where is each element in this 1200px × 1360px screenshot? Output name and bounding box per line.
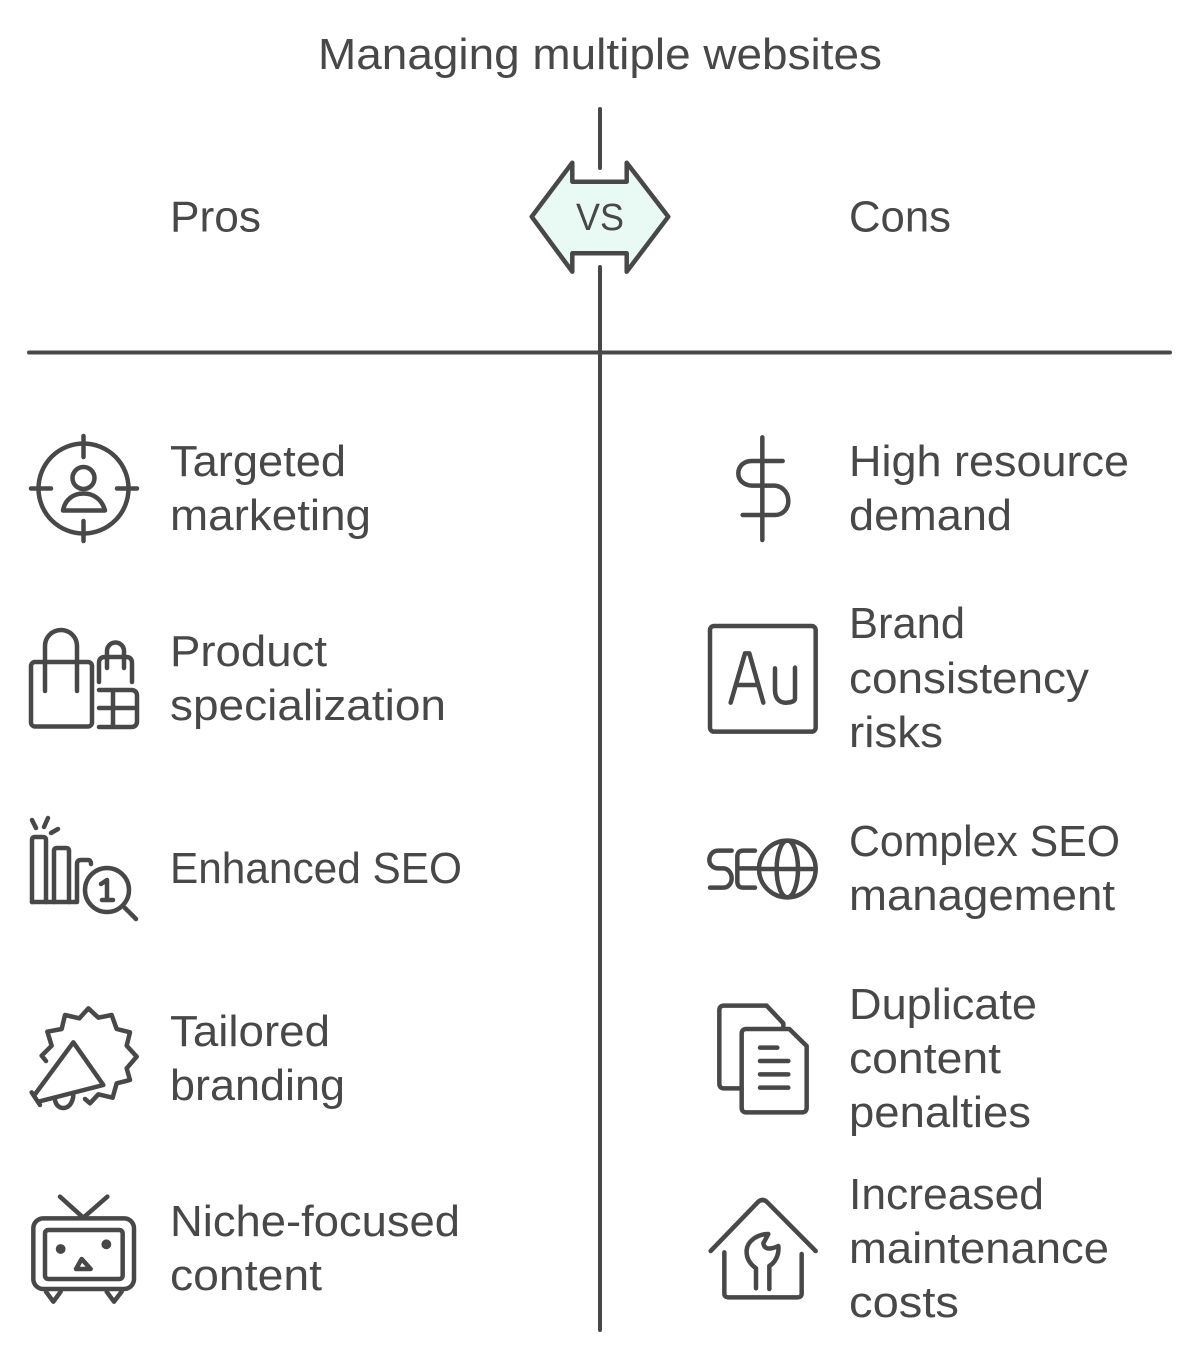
label: niche-focused content: Niche-focused [170,1197,460,1246]
label: duplicate content penalties [849,980,1037,1137]
label: duplicate content penalties: penalties [849,1088,1031,1137]
label: targeted marketing: Targeted [170,437,346,486]
heading: pros: Pros [170,192,261,242]
con item: duplicate content penalties [719,980,1037,1137]
label: niche-focused content: content [170,1251,322,1300]
con item: complex SEO management [709,817,1120,920]
label: duplicate content penalties: content [849,1034,1001,1083]
label: duplicate content penalties: Duplicate [849,980,1037,1029]
label: brand consistency risks: Brand [849,599,965,648]
label: increased maintenance costs: Increased [849,1170,1044,1219]
VS badge [532,163,668,272]
label: brand consistency risks: risks [849,708,943,757]
label: targeted marketing: marketing [170,491,371,540]
icon: duplicate documents [719,1006,807,1112]
horizontal divider [29,350,1170,354]
label: increased maintenance costs [849,1170,1109,1327]
label: high resource demand [849,437,1129,540]
icon: SEO globe [709,841,816,897]
title: Managing multiple websites [318,30,882,79]
label: product specialization [170,627,446,730]
icon: ranking chart with magnifier [32,818,136,919]
label: high resource demand: demand [849,491,1012,540]
icon: dollar sign [738,437,788,540]
icon: shopping bags [31,630,137,727]
icon: megaphone in starburst [32,1008,137,1108]
label: increased maintenance costs: costs [849,1278,959,1327]
label: complex SEO management: Complex SEO [849,817,1120,866]
label: product specialization: specialization [170,681,446,730]
pro item: targeted marketing [31,436,371,541]
label: brand consistency risks: consistency [849,654,1089,703]
label: enhanced SEO: Enhanced SEO [170,844,462,893]
heading: cons: Cons [849,192,951,242]
pro item: tailored branding [32,1007,345,1110]
label: complex SEO management [849,817,1120,920]
con item: brand consistency risks [710,599,1089,757]
label: complex SEO management: management [849,871,1115,920]
icon: retro television [33,1197,134,1302]
label: increased maintenance costs: maintenance [849,1224,1109,1273]
icon: Au badge [710,626,816,732]
label: high resource demand: High resource [849,437,1129,486]
label: niche-focused content [170,1197,460,1300]
label: tailored branding: branding [170,1061,345,1110]
con item: high resource demand [738,437,1129,540]
icon: target person [31,436,137,541]
icon: house with wrench [711,1200,816,1297]
label: tailored branding [170,1007,345,1110]
pro item: niche-focused content [33,1197,460,1302]
center vertical divider [598,109,602,1330]
pro item: product specialization [31,627,446,730]
pro item: enhanced SEO [32,818,462,919]
con item: increased maintenance costs [711,1170,1109,1327]
label: targeted marketing [170,437,371,540]
label: product specialization: Product [170,627,327,676]
label: brand consistency risks [849,599,1089,757]
label: tailored branding: Tailored [170,1007,330,1056]
VS badge: VS [576,197,624,239]
